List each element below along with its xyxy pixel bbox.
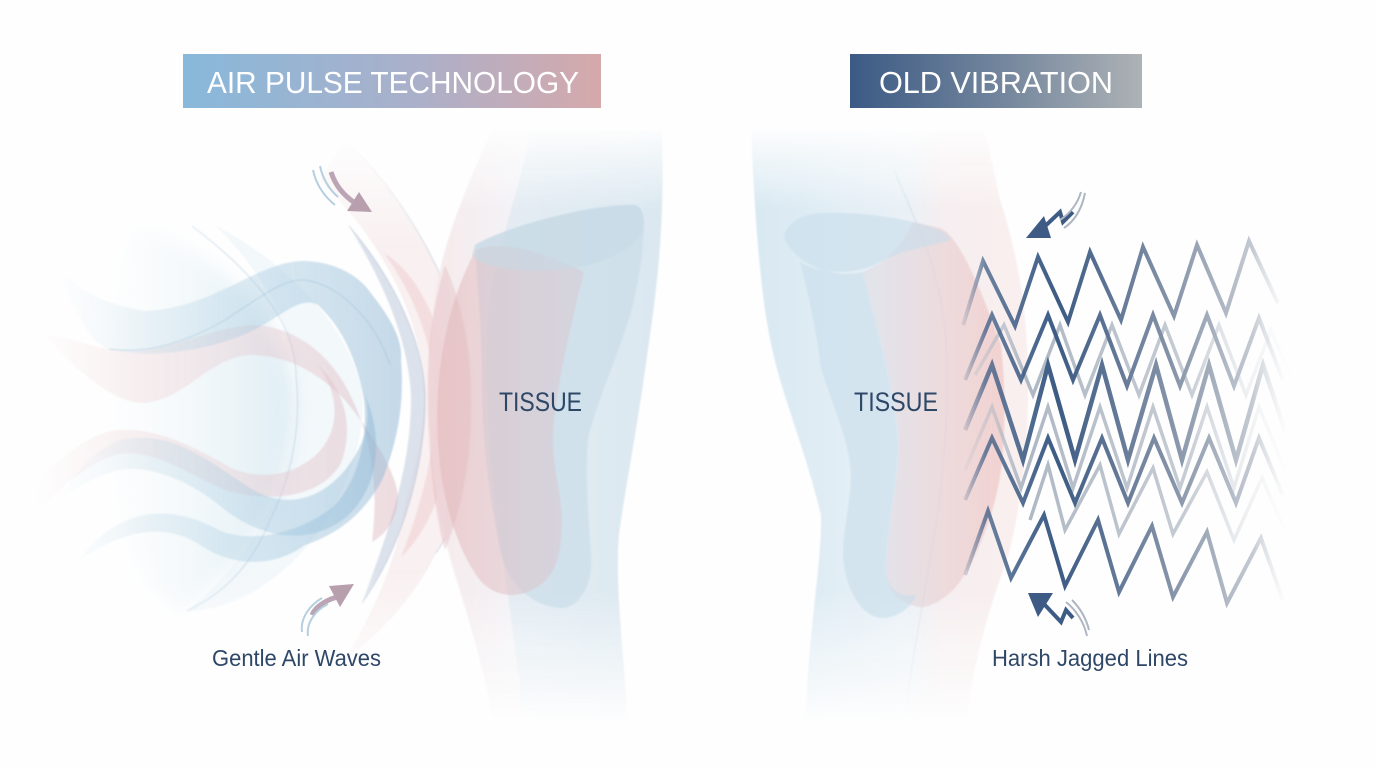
- panel: old vibration diagram: [751, 130, 1290, 720]
- label: harsh jagged lines: Harsh Jagged Lines: [992, 645, 1188, 671]
- muscle: pink: [863, 222, 1004, 607]
- muscle: pink: [437, 246, 584, 595]
- title: old vibration: [850, 54, 1142, 108]
- muscle top cap: [472, 205, 643, 270]
- arrow: bottom air: [302, 584, 354, 636]
- title: old vibration: OLD VIBRATION: [879, 65, 1113, 100]
- muscle: blue: [784, 213, 950, 618]
- title: air pulse technology: AIR PULSE TECHNOLOGY: [207, 65, 579, 100]
- muscle: blue: [475, 205, 644, 608]
- label: gentle air waves: Gentle Air Waves: [212, 645, 381, 671]
- leg: [428, 130, 663, 720]
- air wave arcs: [187, 178, 445, 624]
- arrow: bottom vibration: [1028, 593, 1089, 636]
- jagged lines: [963, 241, 1290, 603]
- leg: [751, 130, 1028, 720]
- panel: air pulse diagram: [78, 144, 663, 692]
- arrow: top vibration: [1026, 192, 1085, 238]
- arrow: top air: [313, 166, 372, 212]
- air wave ribbons: [36, 261, 402, 562]
- soft air glow: [100, 225, 296, 610]
- title: air pulse technology: [183, 54, 601, 108]
- label: tissue: TISSUE: [499, 387, 582, 417]
- label: tissue: TISSUE: [854, 387, 938, 417]
